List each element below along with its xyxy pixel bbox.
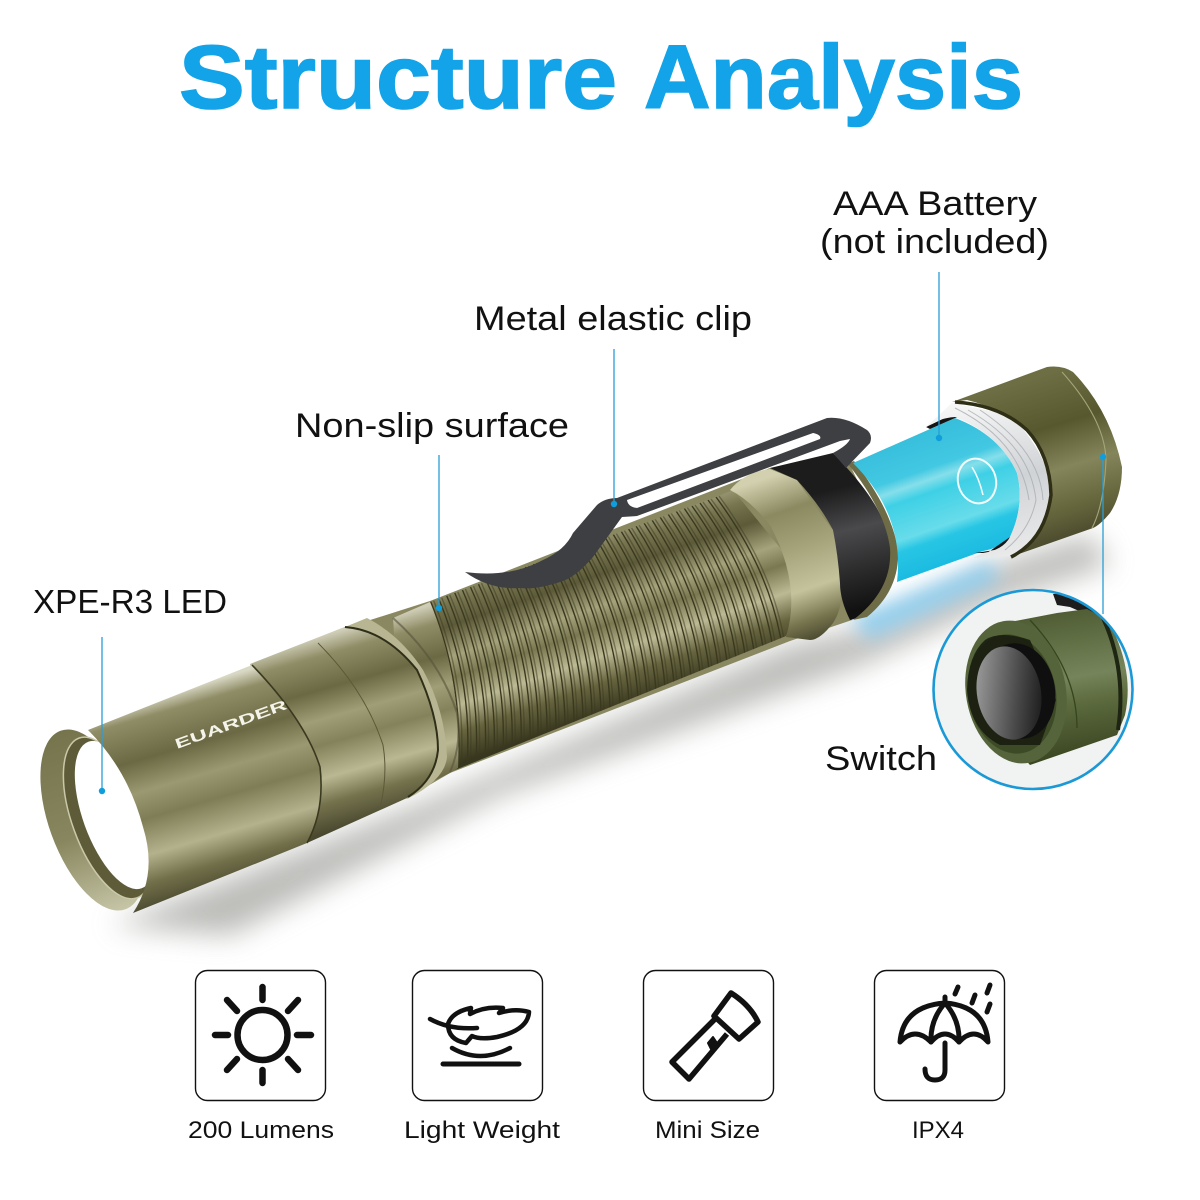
black band: [770, 453, 891, 620]
battery: [853, 418, 1020, 582]
callout: AAA battery: (not included): [820, 223, 1049, 261]
callout: AAA battery: [820, 185, 1049, 441]
callout: XPE-R3 LED: XPE-R3 LED: [33, 583, 227, 620]
feature: light weight: Light Weight: [404, 1117, 560, 1144]
blue glow: [850, 560, 1000, 640]
icon: flashlight: [672, 993, 758, 1079]
feature: 200 lumens: 200 Lumens: [188, 1117, 334, 1144]
textured grip: [420, 469, 842, 772]
ground shadow: [110, 535, 1110, 935]
inset front face: [965, 620, 1066, 764]
collar seam: [345, 627, 438, 797]
pocket clip: [465, 418, 871, 588]
LED lens: [58, 731, 172, 899]
callout: metal elastic clip: [474, 300, 752, 507]
grip ribs: [430, 496, 784, 770]
callout: XPE-R3 LED: [33, 583, 227, 794]
lens bezel ring: [19, 716, 172, 924]
thread grooves: [955, 408, 1043, 550]
inset dark strip: [1103, 618, 1120, 730]
tail cap: [952, 367, 1122, 556]
battery gap: [926, 414, 1010, 553]
neck collar: [340, 602, 458, 799]
inset button: [976, 646, 1042, 740]
callout: non-slip surface: [295, 407, 569, 611]
cap seam: [1062, 372, 1106, 528]
callout: AAA battery: AAA Battery: [833, 185, 1037, 223]
title: Structure: [179, 28, 617, 128]
callout: switch: [825, 454, 1106, 778]
grip shoulder: [730, 469, 842, 640]
inset cap body: [1015, 609, 1128, 765]
icon: feather: [430, 1008, 529, 1064]
callout: metal elastic clip: Metal elastic clip: [474, 300, 752, 338]
switch inset: [933, 590, 1133, 790]
feature: 200 lumens: [188, 970, 334, 1144]
title: Analysis: [644, 28, 1023, 128]
threaded ring: [925, 403, 1051, 558]
feature: IPX4: IPX4: [912, 1117, 964, 1144]
brand logo: EUARDER: [173, 696, 289, 752]
icon: sun: [215, 987, 311, 1083]
inset clip tip: [1053, 594, 1095, 614]
feature: IPX4: [874, 970, 1004, 1144]
zoom head: [88, 665, 321, 913]
body base: [345, 465, 895, 798]
callout: non-slip surface: Non-slip surface: [295, 407, 569, 445]
battery logo: [953, 454, 1001, 508]
band rim: [848, 461, 898, 620]
cap inner edge: [955, 402, 1051, 557]
feature: light weight: [404, 970, 560, 1144]
rear seam: [318, 643, 385, 808]
callout: switch: Switch: [825, 740, 937, 778]
flashlight illustration: [19, 367, 1122, 935]
feature: mini size: [644, 970, 774, 1144]
icon: umbrella: [900, 985, 990, 1080]
feature: mini size: Mini Size: [655, 1117, 760, 1144]
head seam: [252, 665, 321, 843]
rear head segment: [250, 628, 438, 843]
title: [179, 28, 1023, 128]
